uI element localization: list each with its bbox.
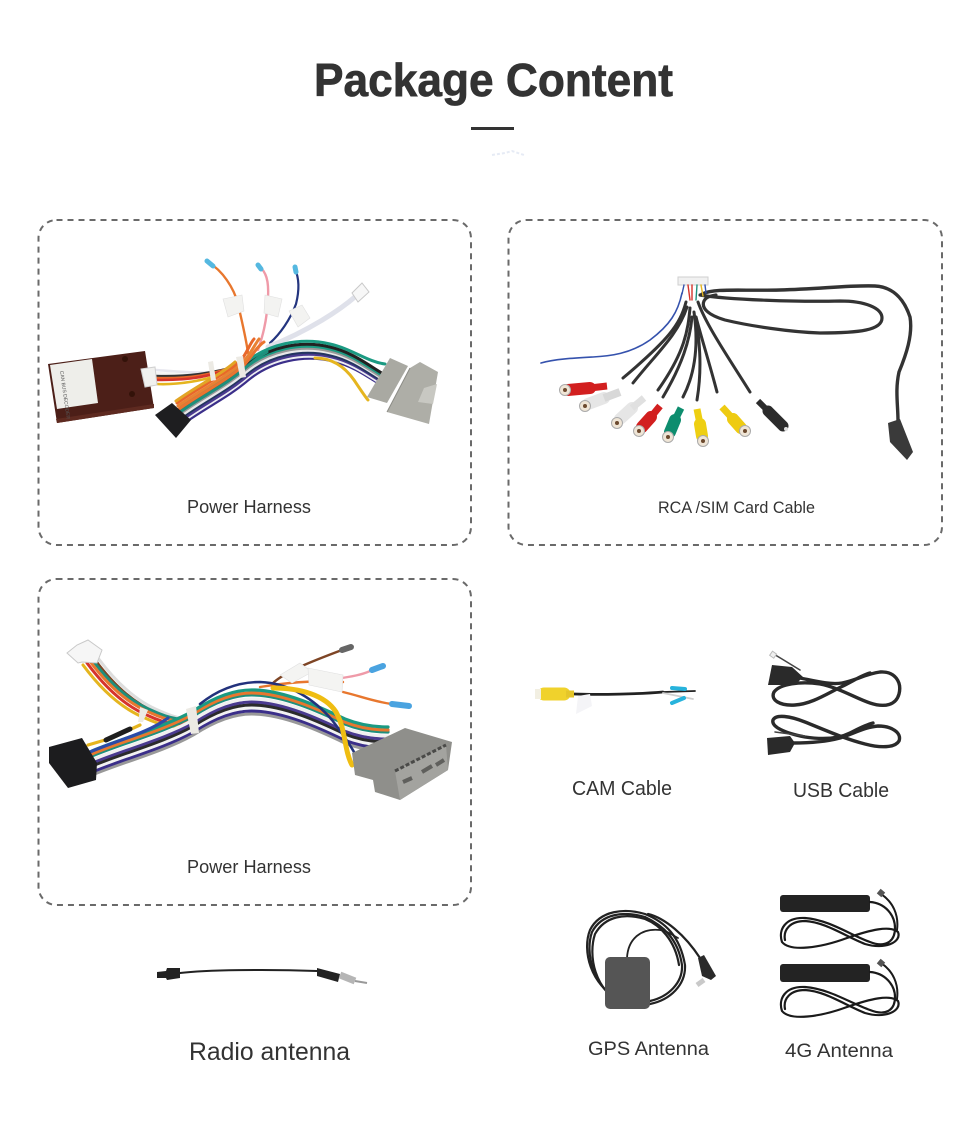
decoder label: CAN BUS DECODER [58,370,71,420]
module lead [627,930,678,958]
label: Power Harness [187,497,311,517]
thin leads [260,650,392,704]
audio jack [758,401,788,431]
label: RCA /SIM Card Cable [658,498,815,517]
item: CAM cable [535,688,695,800]
navy arc wire [200,682,354,752]
lower USB cable [767,716,900,755]
wire: pink lead [258,266,268,350]
panel: power harness [38,579,471,905]
title: Package Content [314,54,673,106]
faint label artefact [492,151,524,155]
red plug 2 [634,406,660,436]
yellow plug 2 [722,407,750,436]
red plug 1 [560,384,607,396]
wire tags [223,295,310,327]
antenna 1 [780,889,899,948]
decoder screws [122,356,135,397]
label: 4G Antenna [785,1040,893,1062]
left plug [157,968,180,980]
cable ties [138,706,199,734]
vehicle plug [352,728,452,800]
black RCA leads [623,302,750,400]
cable ties [208,356,246,381]
label: CAM Cable [572,778,672,800]
panel: power harness with decoder [38,220,471,545]
icon: blue tips [207,261,296,272]
panel frame [508,220,942,545]
item: radio antenna [157,968,367,1066]
black plug [155,403,191,438]
cable [180,970,317,973]
wire tags [280,663,343,692]
label: Radio antenna [189,1038,350,1066]
item: GPS antenna [587,911,716,1060]
panel: RCA / SIM card cable [508,220,942,545]
GPS module [605,957,650,1009]
white socket on decoder [141,367,157,387]
yellow thick wire [273,688,352,765]
right plug [317,968,340,982]
label: Power Harness [187,857,311,877]
upper bundle [83,658,210,727]
decoder box [48,351,154,423]
label: USB Cable [793,780,889,802]
white socket [678,277,708,285]
label: GPS Antenna [588,1039,709,1060]
wire: orange lead [209,263,248,353]
antenna 2 [780,959,899,1017]
upper USB cable [768,651,900,705]
RCA plug [535,689,574,699]
black plug [49,738,97,788]
long black SIM cable [702,286,911,421]
tag [576,694,592,714]
panel frame [38,579,471,905]
white plug 2 [612,398,644,428]
item: 4G antennas [780,889,899,1062]
white plug on lead [352,283,369,302]
blue wire [541,293,682,363]
main bundle [88,690,388,775]
panel frame [38,220,471,545]
green plug [662,408,681,442]
blue tips [672,688,685,703]
lead tips [342,647,409,706]
yellow plug 1 [697,409,708,446]
colored core wires [682,285,706,300]
wire: navy lead [270,269,298,343]
white plug 1 [580,392,620,412]
connector tip [697,980,704,985]
metal pin [340,975,355,981]
black cable loop [700,295,882,333]
title underline [471,127,514,130]
item: USB cables [767,651,900,802]
SIM module [888,419,913,460]
wire bundle: decoder to crossing [156,362,245,384]
split wires [663,691,695,699]
coil [587,911,700,1004]
wire bundle: head unit plug to vehicle plug [176,339,388,423]
angled connector [698,955,716,980]
black cable [574,692,663,694]
vehicle plug [367,358,438,424]
pin tip [355,981,367,983]
wire: white lead [268,296,356,347]
RCA plugs [560,384,788,446]
white socket [67,640,102,663]
